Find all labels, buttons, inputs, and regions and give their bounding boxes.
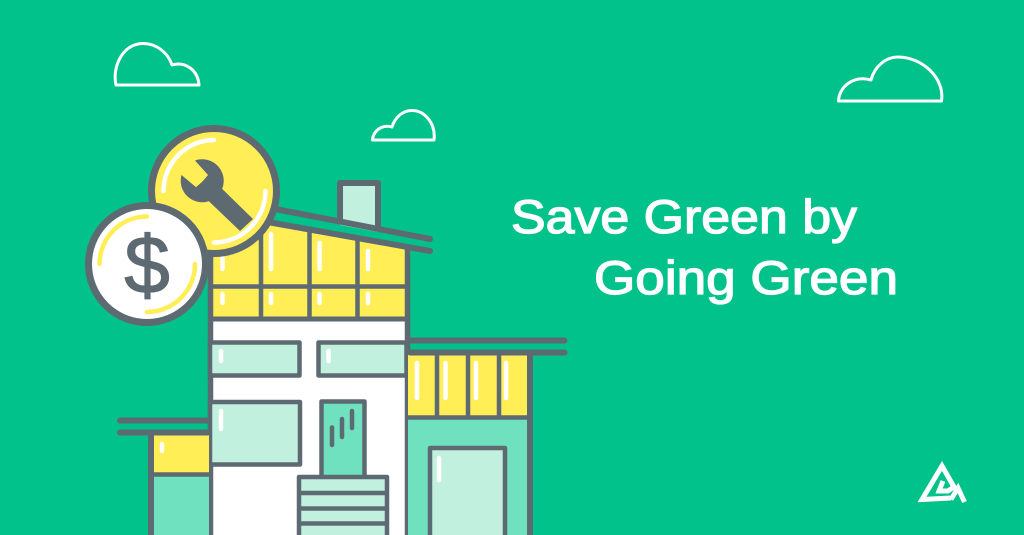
chimney (340, 183, 378, 232)
cloud: top right (838, 57, 942, 101)
roof solar panel grid (210, 221, 408, 319)
heading: Going Green (594, 251, 898, 304)
icon: wrench coin (152, 128, 276, 254)
roof panel highlights (222, 234, 368, 303)
icon: wrench (181, 159, 253, 231)
main house body (210, 212, 408, 535)
logo (922, 466, 964, 502)
dollar sign: $ (124, 220, 170, 311)
roof lines (262, 208, 430, 251)
left annex (120, 420, 209, 535)
upper right window (318, 342, 406, 376)
front door (322, 402, 364, 478)
icon: dollar coin (88, 206, 206, 322)
house walls (210, 240, 408, 535)
front steps (299, 477, 387, 535)
right annex (408, 340, 564, 535)
heading: Save Green by (511, 190, 858, 243)
cloud: top left (115, 44, 199, 85)
window highlights (221, 351, 328, 429)
right annex glass door (430, 448, 505, 535)
heading (511, 190, 898, 304)
lower left window (210, 402, 300, 464)
upper left window (210, 342, 300, 376)
cloud: small centre (372, 110, 434, 140)
house illustration (120, 183, 564, 535)
